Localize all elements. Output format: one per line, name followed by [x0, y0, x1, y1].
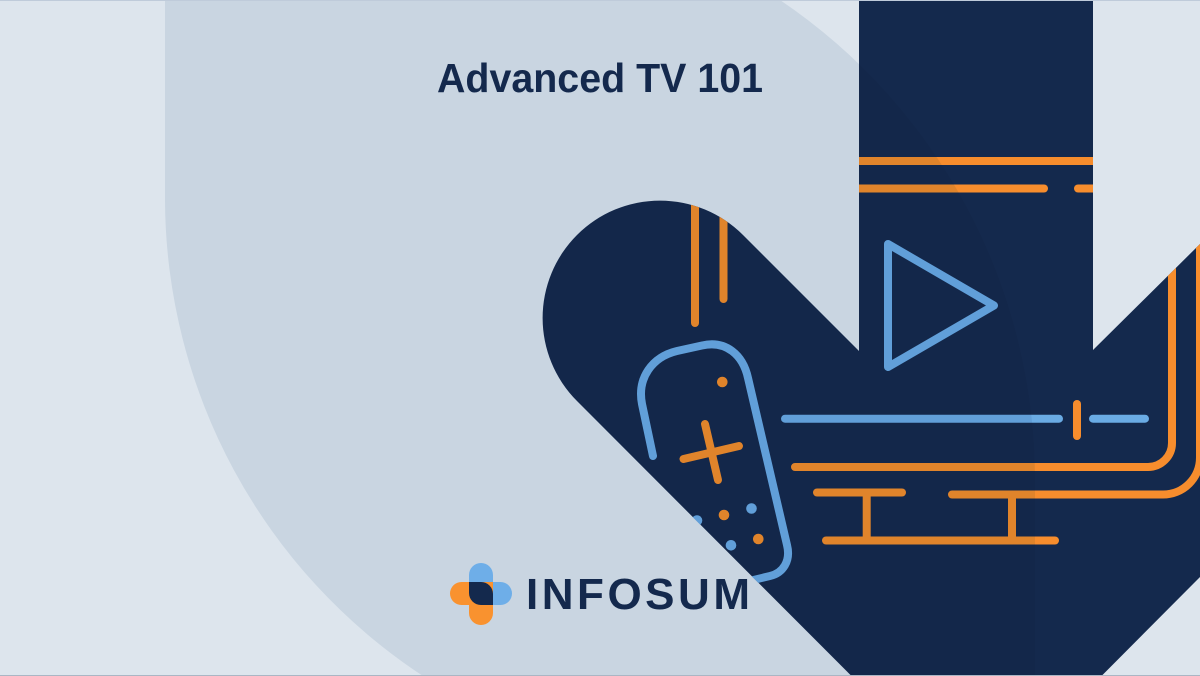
logo wordmark: INFOSUM	[526, 570, 750, 619]
TV screen outline	[795, 230, 1200, 494]
icon: logo cross	[450, 563, 512, 625]
TV stand	[817, 492, 1055, 540]
large translucent background shape	[165, 0, 1035, 676]
icon: remote control	[641, 344, 788, 582]
vertical lines at top of circle	[695, 190, 724, 323]
navy arrow shape	[543, 1, 1200, 676]
title: Advanced TV 101	[437, 55, 763, 101]
TV and remote line art	[641, 161, 1200, 582]
logo: InfoSum	[450, 563, 750, 625]
top lines	[840, 161, 1110, 188]
icon: play triangle	[888, 244, 994, 367]
progress bar	[785, 404, 1145, 436]
